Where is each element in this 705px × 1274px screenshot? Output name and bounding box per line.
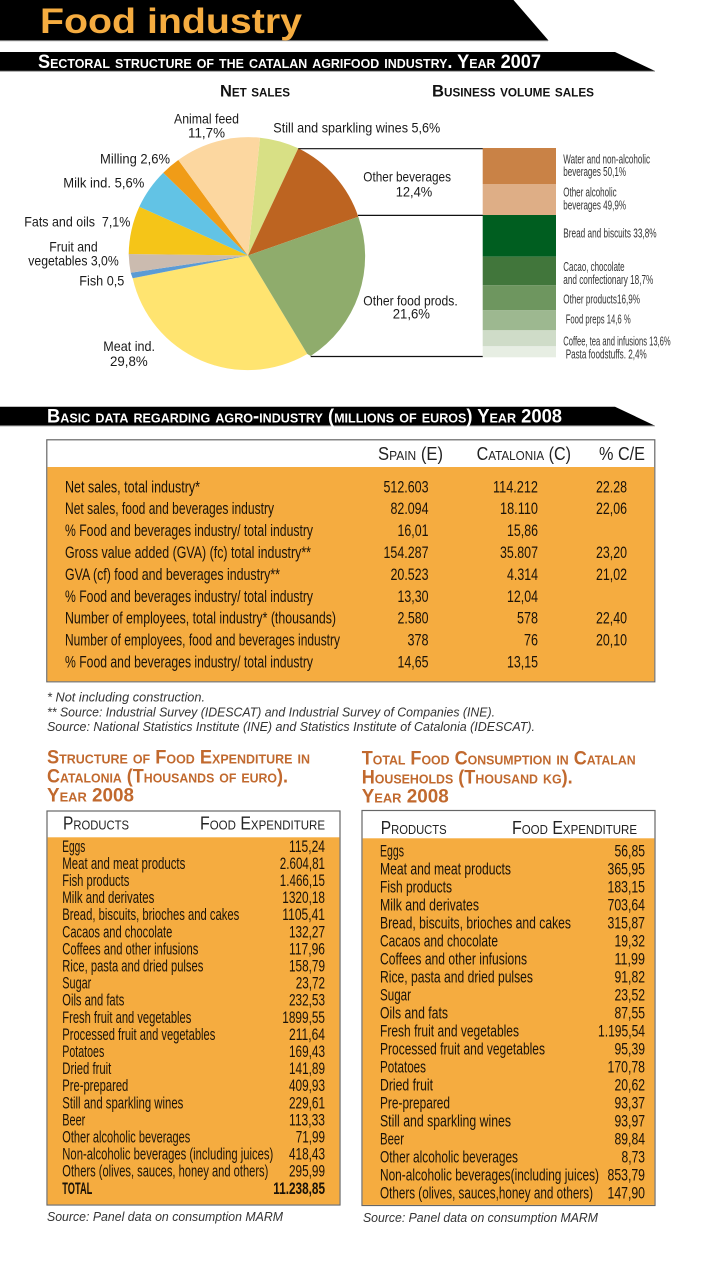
pie labels: 12,4% <box>396 184 432 200</box>
product labels: Fresh fruit and vegetables <box>62 1009 191 1027</box>
title banner: Food industry <box>40 2 303 41</box>
expenditure values: 141,89 <box>289 1060 325 1078</box>
expenditure values: 115,24 <box>289 838 325 856</box>
consumption values: 23,52 <box>614 986 645 1004</box>
expenditure values: 211,64 <box>289 1026 325 1044</box>
product labels: Still and sparkling wines <box>380 1112 511 1130</box>
consumption values: 56,85 <box>614 843 645 861</box>
consumption values: 93,97 <box>614 1112 645 1130</box>
column: Catalonia values: 35.807 <box>500 544 538 562</box>
table header: Products <box>63 813 129 833</box>
column: Catalonia values <box>493 478 538 672</box>
table header: Food Expenditure <box>200 813 325 833</box>
footnotes: Source: National Statistics Institute (INE) and Statistics Institute of Catalonia (IDESCAT). <box>47 720 535 734</box>
product labels: Others (olives, sauces,honey and others) <box>380 1184 593 1202</box>
consumption values: 11,99 <box>614 951 645 969</box>
product labels: Still and sparkling wines <box>62 1094 183 1112</box>
product labels: Non-alcoholic beverages(including juices) <box>380 1166 599 1184</box>
product labels: Non-alcoholic beverages (including juices) <box>62 1146 273 1164</box>
product labels: Potatoes <box>62 1043 104 1061</box>
column: Spain values: 82.094 <box>390 500 428 518</box>
pie labels: Milk ind. 5,6% <box>63 175 144 191</box>
consumption values: 91,82 <box>614 969 645 987</box>
footnotes: * Not including construction. <box>47 691 205 705</box>
expenditure values: 1899,55 <box>282 1009 325 1027</box>
stacked bar labels: beverages 49,9% <box>563 198 626 212</box>
column: Catalonia values: 578 <box>517 610 538 628</box>
table row labels: Number of employees, food and beverages industry <box>65 632 341 650</box>
expenditure values: 158,79 <box>289 958 325 976</box>
stacked bar labels: and confectionary 18,7% <box>563 273 653 287</box>
heading: total food consumption: Households (Thousand kg). <box>362 767 573 788</box>
product labels: Fish products <box>380 879 452 897</box>
source note: right table: Source: Panel data on consumption MARM <box>363 1211 599 1225</box>
product labels <box>380 843 599 1202</box>
product labels: Dried fruit <box>380 1076 433 1094</box>
column: percent C/E values: 22.28 <box>596 478 627 496</box>
stacked bar: business volume sales <box>483 148 556 357</box>
product labels: Rice, pasta and dried pulses <box>62 958 203 976</box>
table row labels: % Food and beverages industry/ total industry <box>65 588 314 606</box>
stacked bar labels: Water and non-alcoholic <box>563 152 650 166</box>
product labels: Milk and derivates <box>62 889 154 907</box>
pie labels: Milling 2,6% <box>100 150 170 166</box>
table header: Catalonia (C) <box>477 444 571 464</box>
column: percent C/E values: 22,40 <box>596 610 627 628</box>
consumption values: 95,39 <box>614 1040 645 1058</box>
table header: Spain (E) <box>378 444 443 464</box>
heading: business volume sales: Business volume sales <box>432 82 594 100</box>
product labels: Fish products <box>62 872 129 890</box>
table header <box>381 818 637 838</box>
product labels: Fresh fruit and vegetables <box>380 1022 519 1040</box>
product labels: Other alcoholic beverages <box>380 1148 518 1166</box>
table header <box>378 444 645 464</box>
pie labels: Fats and oils 7,1% <box>24 214 130 230</box>
consumption values: 170,78 <box>608 1058 645 1076</box>
column: Catalonia values: 18.110 <box>500 500 538 518</box>
product labels: Cacaos and chocolate <box>380 933 498 951</box>
expenditure values: 117,96 <box>289 940 325 958</box>
consumption values: 8,73 <box>622 1148 645 1166</box>
product labels: Bread, biscuits, brioches and cakes <box>62 906 239 924</box>
heading: total food consumption <box>362 748 636 807</box>
consumption values: 147,90 <box>608 1184 645 1202</box>
column: percent C/E values: 23,20 <box>596 544 627 562</box>
section banner: sectoral structure: Sectoral structure of the catalan agrifood industry. Year 2007 <box>38 52 541 73</box>
product labels: Oils and fats <box>62 992 124 1010</box>
product labels: TOTAL <box>62 1180 92 1198</box>
product labels: Sugar <box>62 975 92 993</box>
stacked bar labels: Other alcoholic <box>563 186 617 200</box>
expenditure values: 229,61 <box>289 1094 325 1112</box>
expenditure values: 1320,18 <box>282 889 325 907</box>
panel: basic data table <box>47 440 655 682</box>
table row labels: Gross value added (GVA) (fc) total industry** <box>65 544 311 562</box>
pie labels: 29,8% <box>110 353 148 369</box>
expenditure values: 169,43 <box>289 1043 325 1061</box>
column: Spain values: 378 <box>408 632 428 650</box>
footnotes: ** Source: Industrial Survey (IDESCAT) and Industrial Survey of Companies (INE). <box>47 705 495 719</box>
stacked bar labels: beverages 50,1% <box>563 165 626 179</box>
product labels: Coffees and other infusions <box>380 951 527 969</box>
product labels: Others (olives, sauces, honey and others) <box>62 1163 268 1181</box>
table row labels: Net sales, total industry* <box>65 478 200 496</box>
product labels: Rice, pasta and dried pulses <box>380 969 533 987</box>
table header: Food Expenditure <box>512 818 637 838</box>
product labels: Potatoes <box>380 1058 426 1076</box>
column: Spain values: 154.287 <box>384 544 428 562</box>
connector lines from pie to stacked bar <box>298 149 483 356</box>
pie labels: Fruit and <box>49 239 98 255</box>
consumption values: 1.195,54 <box>598 1022 645 1040</box>
consumption values <box>598 843 645 1202</box>
column: Catalonia values: 13,15 <box>507 654 538 672</box>
title banner <box>0 0 548 41</box>
consumption values: 89,84 <box>614 1130 645 1148</box>
table row labels: Number of employees, total industry* (thousands) <box>65 610 336 628</box>
table row labels <box>65 478 341 672</box>
column: Catalonia values: 15,86 <box>507 522 538 540</box>
consumption values: 93,37 <box>614 1094 645 1112</box>
column: percent C/E values: 21,02 <box>596 566 627 584</box>
stacked bar labels: Food preps 14,6 % <box>566 312 631 326</box>
column: Spain values: 2.580 <box>398 610 428 628</box>
table row labels: % Food and beverages industry/ total industry <box>65 654 314 672</box>
column: percent C/E values: 20,10 <box>596 632 627 650</box>
pie labels: Other food prods. <box>363 293 458 309</box>
stacked bar labels: Pasta foodstuffs. 2,4% <box>566 347 647 361</box>
heading: structure of food expenditure: Catalonia (Thousands of euro). <box>47 766 288 787</box>
consumption values: 19,32 <box>614 933 645 951</box>
heading: net sales: Net sales <box>220 82 290 100</box>
expenditure values: 1.466,15 <box>280 872 325 890</box>
expenditure values: 409,93 <box>289 1077 325 1095</box>
product labels: Pre-prepared <box>62 1077 128 1095</box>
product labels: Bread, biscuits, brioches and cakes <box>380 915 571 933</box>
table row labels: Net sales, food and beverages industry <box>65 500 275 518</box>
product labels: Pre-prepared <box>380 1094 450 1112</box>
product labels: Meat and meat products <box>380 861 511 879</box>
table row labels: GVA (cf) food and beverages industry** <box>65 566 280 584</box>
stacked bar labels: Other products16,9% <box>563 292 640 306</box>
pie labels: Meat ind. <box>103 338 155 354</box>
product labels: Eggs <box>62 838 85 856</box>
consumption values: 853,79 <box>608 1166 645 1184</box>
expenditure values: 23,72 <box>296 975 325 993</box>
product labels: Meat and meat products <box>62 855 185 873</box>
column: Spain values <box>384 478 428 672</box>
column: Spain values: 20.523 <box>390 566 428 584</box>
column: Catalonia values: 12,04 <box>507 588 538 606</box>
panel: food expenditure table <box>47 811 340 1205</box>
expenditure values: 132,27 <box>289 923 325 941</box>
heading: structure of food expenditure <box>47 747 310 807</box>
product labels: Coffees and other infusions <box>62 940 198 958</box>
product labels: Eggs <box>380 843 404 861</box>
product labels: Beer <box>380 1130 404 1148</box>
column: Catalonia values: 114.212 <box>493 478 538 496</box>
product labels: Sugar <box>380 986 411 1004</box>
stacked bar labels <box>563 152 671 361</box>
panel: food consumption table <box>362 810 655 1206</box>
expenditure values: 71,99 <box>296 1128 325 1146</box>
section banner: basic data: Basic data regarding agro-industry (millions of euros) Year 2008 <box>47 406 562 427</box>
stacked bar labels: Bread and biscuits 33,8% <box>563 227 657 241</box>
product labels: Processed fruit and vegetables <box>62 1026 215 1044</box>
pie labels: 21,6% <box>393 305 430 321</box>
table header: % C/E <box>599 444 645 464</box>
product labels: Cacaos and chocolate <box>62 923 172 941</box>
product labels: Beer <box>62 1111 86 1129</box>
consumption values: 365,95 <box>608 861 645 879</box>
footnotes <box>47 691 535 734</box>
heading: total food consumption: Total Food Consumption in Catalan <box>362 748 636 769</box>
column: Spain values: 14,65 <box>398 654 428 672</box>
product labels: Other alcoholic beverages <box>62 1128 190 1146</box>
column: Catalonia values: 76 <box>524 632 538 650</box>
product labels <box>62 838 273 1198</box>
consumption values: 87,55 <box>614 1004 645 1022</box>
pie chart: net sales <box>129 137 365 370</box>
consumption values: 315,87 <box>608 915 645 933</box>
column: percent C/E values: 22,06 <box>596 500 627 518</box>
pie labels: 11,7% <box>188 125 225 141</box>
product labels: Oils and fats <box>380 1004 448 1022</box>
expenditure values: 232,53 <box>289 992 325 1010</box>
heading: structure of food expenditure: Year 2008 <box>47 786 134 807</box>
column: Spain values: 512.603 <box>384 478 428 496</box>
table row labels: % Food and beverages industry/ total industry <box>65 522 314 540</box>
table header <box>63 813 325 833</box>
expenditure values: 418,43 <box>289 1146 325 1164</box>
expenditure values: 1105,41 <box>282 906 325 924</box>
pie labels: Still and sparkling wines 5,6% <box>273 120 440 136</box>
product labels: Processed fruit and vegetables <box>380 1040 545 1058</box>
expenditure values: 2.604,81 <box>280 855 325 873</box>
expenditure values: 113,33 <box>289 1111 325 1129</box>
expenditure values <box>273 838 325 1198</box>
expenditure values: 11.238,85 <box>273 1180 325 1198</box>
pie labels <box>24 110 458 369</box>
source note: left table: Source: Panel data on consumption MARM <box>47 1210 284 1224</box>
pie labels: Fish 0,5 <box>79 273 124 289</box>
stacked bar labels: Cacao, chocolate <box>563 260 625 274</box>
product labels: Milk and derivates <box>380 897 479 915</box>
pie labels: Animal feed <box>174 110 239 126</box>
column: Spain values: 16,01 <box>398 522 428 540</box>
pie labels: vegetables 3,0% <box>28 253 119 269</box>
pie labels: Other beverages <box>363 169 451 185</box>
consumption values: 183,15 <box>608 879 645 897</box>
column: percent C/E values <box>596 478 627 650</box>
product labels: Dried fruit <box>62 1060 112 1078</box>
heading: total food consumption: Year 2008 <box>362 786 449 807</box>
table header: Products <box>381 818 447 838</box>
consumption values: 703,64 <box>608 897 645 915</box>
column: Spain values: 13,30 <box>398 588 428 606</box>
column: Catalonia values: 4.314 <box>507 566 538 584</box>
heading: structure of food expenditure: Structure of Food Expenditure in <box>47 747 310 768</box>
consumption values: 20,62 <box>614 1076 645 1094</box>
expenditure values: 295,99 <box>289 1163 325 1181</box>
